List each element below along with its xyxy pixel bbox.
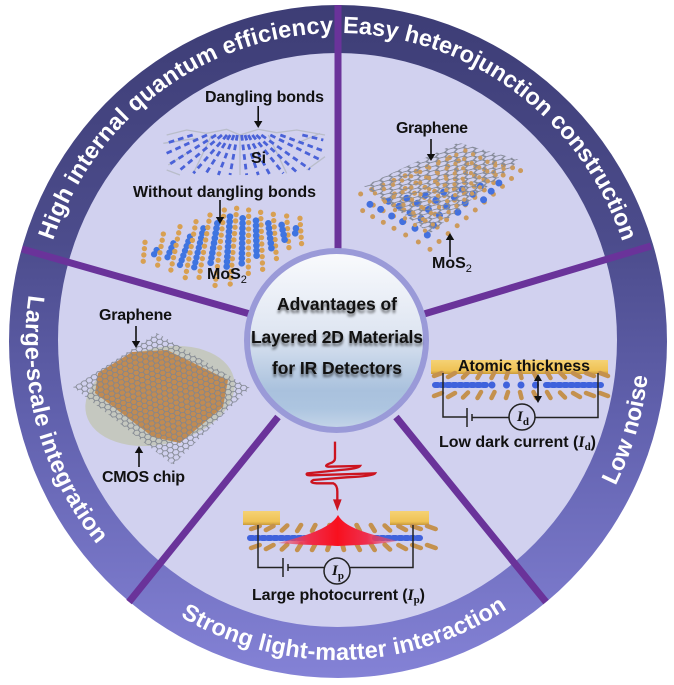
hub title — [251, 294, 423, 378]
diagram: silicon lattice — [163, 129, 325, 175]
arrow: to MoS2 layer — [446, 233, 454, 257]
arrow: to CMOS chip — [135, 446, 143, 467]
label: MoS2: MoS — [207, 266, 241, 283]
diagram: gold contact — [431, 360, 608, 374]
label: graphene: Graphene — [99, 307, 172, 324]
arrow: thickness double arrow — [534, 374, 542, 403]
label: large photocurrent: p — [414, 594, 420, 606]
label: graphene: Graphene — [396, 120, 468, 137]
ring heading: Large-scale integration: Large-scale integration — [20, 296, 105, 544]
label: CMOS chip: CMOS chip — [102, 469, 185, 486]
hub title: Advantages of — [277, 294, 397, 314]
label: dangling bonds: Dangling bonds — [205, 89, 324, 106]
label: MoS2: MoS — [432, 255, 466, 272]
label: Ip in circuit: I — [332, 563, 338, 579]
label: Id in circuit: I — [517, 409, 523, 425]
diagram: gold contacts — [243, 511, 429, 525]
ring heading: Low noise: Low noise — [602, 376, 648, 484]
ring heading: High internal quantum efficiency: High internal quantum efficiency — [38, 20, 333, 240]
hub title: for IR Detectors — [272, 358, 402, 378]
arrow: to MoS2 surface — [216, 200, 224, 224]
label: atomic thickness: Atomic thickness — [458, 358, 590, 375]
panel: strong light-matter interaction — [243, 442, 436, 606]
label: MoS2: 2 — [466, 263, 472, 275]
label: low dark current: d — [585, 441, 591, 453]
panel: high internal quantum efficiency — [133, 89, 325, 287]
diagram: MoS2 side view — [250, 525, 436, 550]
circuit: photocurrent — [258, 525, 413, 584]
ring heading: Strong light-matter interaction: Strong light-matter interaction — [182, 600, 506, 660]
circuit: dark current — [443, 373, 598, 430]
diagram: MoS2 lattice — [143, 208, 302, 287]
diagram: red photoabsorption peak — [278, 515, 397, 546]
diagram: CMOS chip disc — [75, 331, 245, 461]
label: large photocurrent: ) — [420, 587, 425, 604]
label: low dark current: Low dark current (I — [439, 434, 585, 451]
label: Id in circuit: d — [523, 416, 529, 428]
ring heading: Easy heterojunction construction: Easy heterojunction construction — [344, 16, 633, 240]
label: low dark current: ) — [591, 434, 596, 451]
panel: low noise — [431, 358, 608, 453]
icon: incoming light wave — [307, 442, 375, 511]
label: Si: Si — [251, 150, 266, 167]
label: large photocurrent: Large photocurrent (I — [252, 587, 414, 604]
arrow: to graphene layer — [427, 139, 435, 161]
hub title: Layered 2D Materials — [251, 327, 423, 347]
diagram: MoS2 side view — [434, 372, 608, 398]
arrow: to graphene — [132, 326, 140, 348]
label: Ip in circuit: p — [338, 570, 344, 582]
label: without dangling bonds: Without dangling bonds — [133, 184, 316, 201]
panel: large-scale integration — [73, 307, 250, 486]
diagram: orange MoS2 film on chip — [95, 350, 228, 443]
diagram: graphene sheet — [73, 333, 250, 465]
panel: easy heterojunction construction — [361, 120, 521, 275]
label: MoS2: 2 — [241, 274, 247, 286]
diagram: graphene on MoS2 heterostructure — [361, 143, 521, 249]
inner panel disc — [58, 53, 617, 627]
center hub — [247, 251, 426, 430]
arrow: to silicon surface — [254, 106, 262, 128]
